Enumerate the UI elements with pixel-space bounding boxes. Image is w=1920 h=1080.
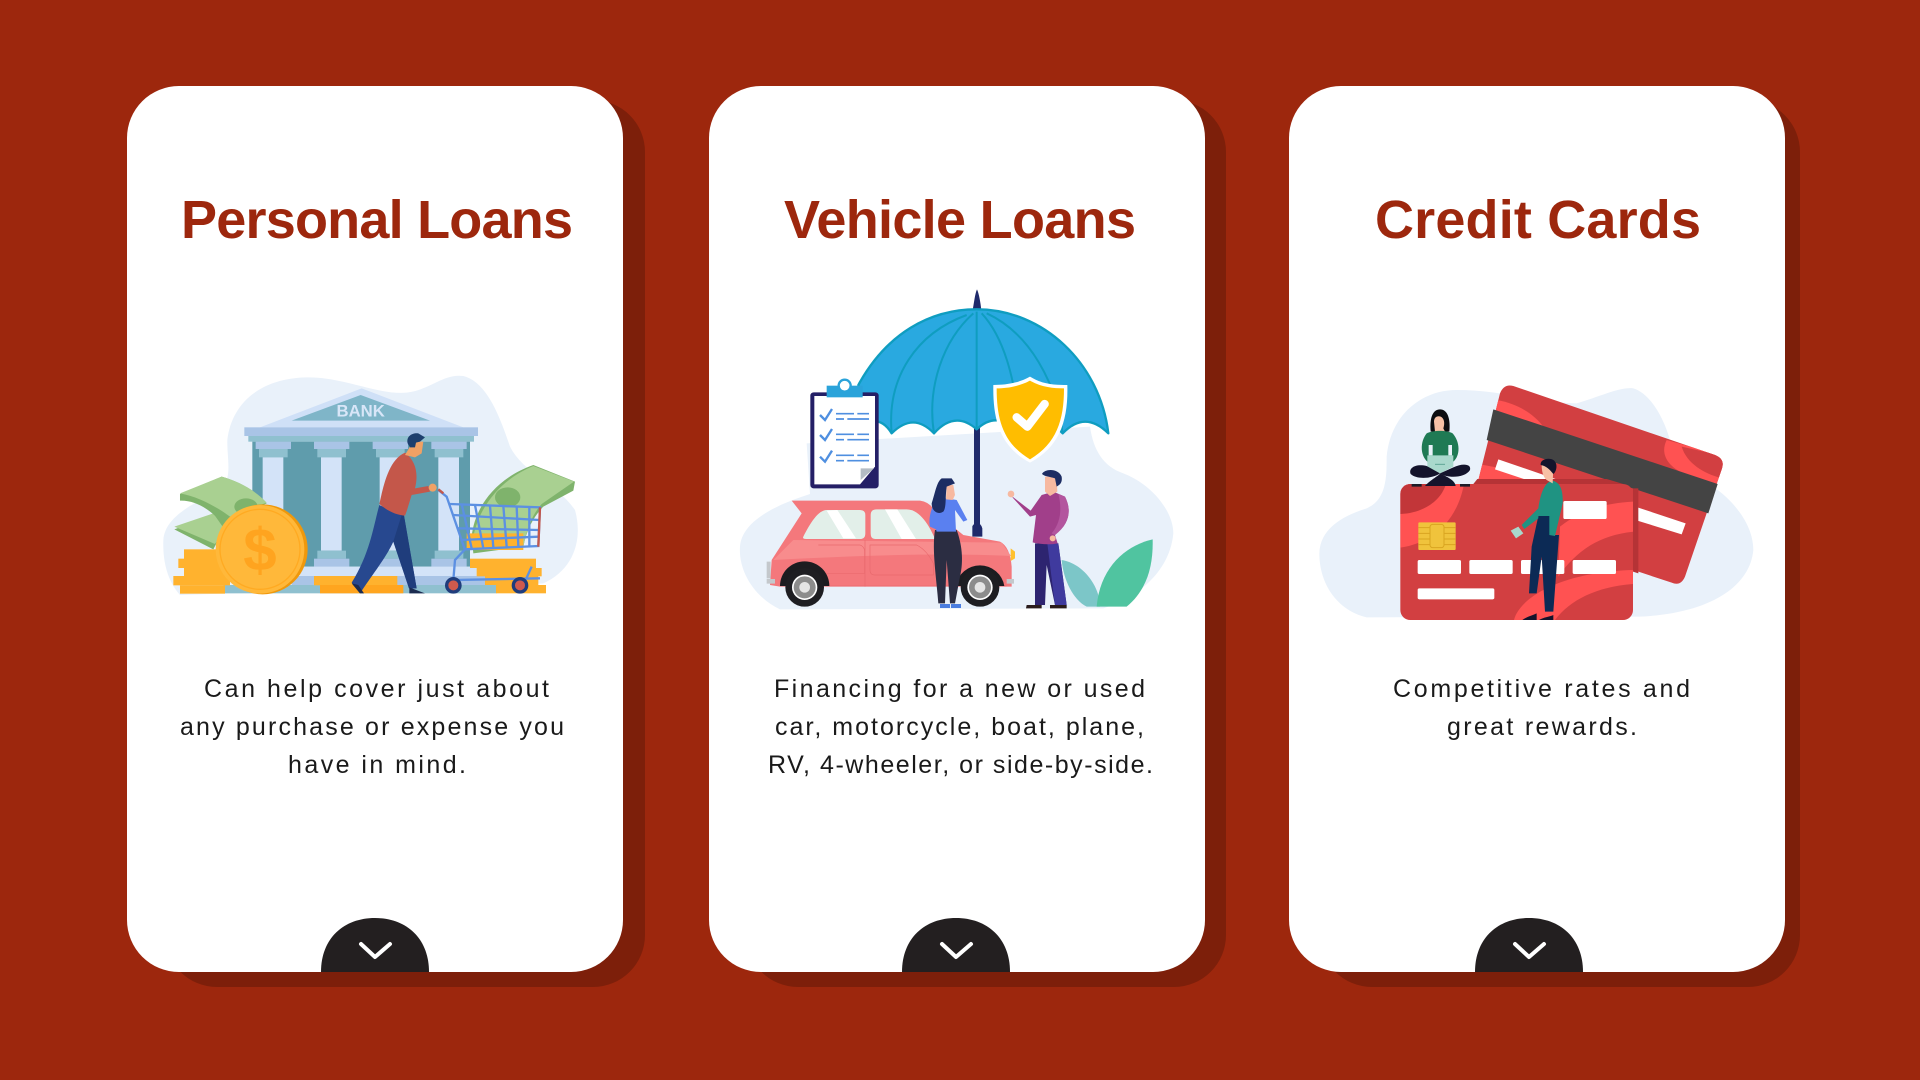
man pushing cart [352,433,437,593]
red car [767,501,1015,607]
umbrella [858,289,1108,537]
illustration: car, umbrella and couple [740,289,1173,609]
leaves [1062,539,1153,607]
panel: vehicle loans [709,86,1226,987]
dropdown button [321,918,429,972]
description: personal loans: have in mind. [288,751,466,779]
sitting woman with laptop [1410,409,1470,487]
dropdown button [902,918,1010,972]
panel: credit cards [1289,86,1800,987]
standing man [1511,459,1563,620]
description: vehicle loans: Financing for a new or used [774,675,1145,703]
description: credit cards [1393,675,1690,741]
description: personal loans [180,675,564,779]
illustration: credit cards and two people [1319,385,1753,620]
heading: credit cards: Credit Cards [1375,190,1701,250]
description: personal loans: any purchase or expense you [180,713,564,741]
woman [929,478,967,608]
bank building [223,388,497,593]
description: vehicle loans: car, motorcycle, boat, plane, [775,713,1144,741]
coin stacks [173,549,546,594]
clipboard checklist [810,380,879,488]
illustration: bank, coins and man with cart [163,376,578,595]
front card [1400,484,1633,620]
shopping cart [438,489,540,592]
panel: personal loans [127,86,645,987]
shield with check [993,377,1067,463]
description: credit cards: Competitive rates and [1393,675,1690,703]
description: credit cards: great rewards. [1447,713,1637,741]
heading: vehicle loans: Vehicle Loans [784,190,1136,250]
heading: personal loans: Personal Loans [181,190,573,250]
back card [1470,385,1727,584]
dollar coin [216,504,308,594]
dropdown button [1475,918,1583,972]
infographic canvas [127,86,1800,987]
description: personal loans: Can help cover just about [204,675,549,703]
man [1008,470,1069,608]
dollar coin: $ [243,517,277,584]
description: vehicle loans [768,675,1153,779]
bank building: BANK [336,401,385,420]
money bills [174,465,575,553]
description: vehicle loans: RV, 4-wheeler, or side-by-side. [768,751,1153,779]
